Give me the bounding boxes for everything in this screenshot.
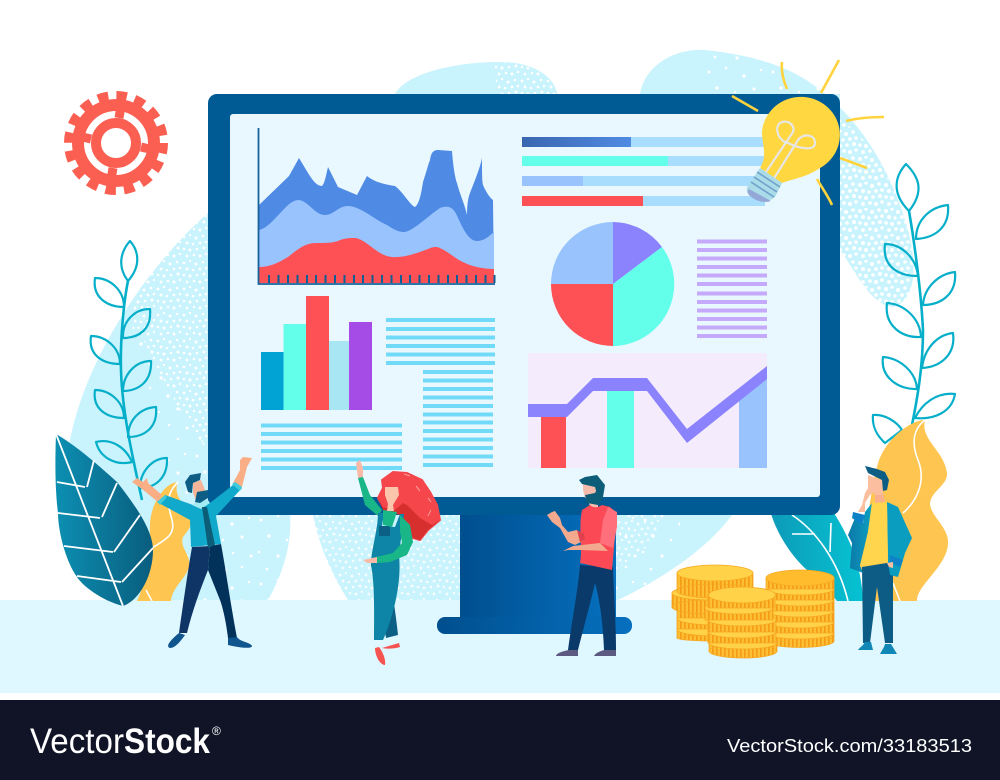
floor (0, 600, 1000, 693)
plant: right orange bush (858, 420, 948, 601)
cuffs (852, 512, 903, 567)
chart axes (258, 128, 495, 284)
text lines: column (423, 370, 493, 467)
bulb glass (760, 97, 840, 183)
face (868, 475, 883, 495)
combo chart (528, 353, 767, 468)
brand logo text: VectorStock (30, 722, 210, 761)
progress bars (522, 137, 765, 206)
registered mark: ® (212, 724, 221, 738)
plant: teal leaf behind man (770, 510, 863, 601)
lower hand (363, 557, 377, 563)
collar (192, 500, 210, 509)
legs (568, 565, 616, 650)
monitor frame (208, 94, 840, 515)
hair (185, 473, 201, 493)
trend line (528, 366, 767, 443)
person: man in red shirt (547, 475, 617, 656)
icon: light bulb (732, 60, 884, 205)
shoes (375, 643, 400, 665)
neck and face (385, 487, 399, 511)
plant: left orange bush (137, 482, 191, 601)
coins: back stack (672, 565, 753, 641)
background blob: top right (640, 50, 914, 307)
hand at chin (858, 488, 873, 512)
coins: right stack (766, 570, 834, 648)
text lines: legend purple (697, 240, 767, 338)
beard (195, 490, 208, 503)
shoes (858, 642, 897, 654)
filament (766, 122, 815, 180)
shoes (556, 650, 616, 656)
area chart (258, 128, 495, 284)
beard (585, 487, 603, 505)
person: man with raised arms (132, 457, 252, 648)
background blob: left (69, 213, 290, 600)
cuffs (157, 482, 242, 505)
arm on hip (376, 515, 413, 563)
jacket right panel (887, 502, 912, 577)
coins: front stack (705, 587, 777, 658)
legs (862, 562, 893, 643)
hands and forearms (132, 457, 252, 502)
hair shadow (378, 498, 440, 540)
text lines: right of bar chart (386, 318, 495, 365)
tie (202, 507, 215, 548)
coin stacks (672, 565, 834, 658)
text lines: below bar chart (261, 424, 402, 470)
shirt (860, 502, 888, 567)
hair (378, 472, 440, 540)
plant: left vine (91, 241, 167, 500)
bulb rays (732, 60, 884, 205)
raised arm (358, 477, 382, 516)
pointing forearm (563, 543, 608, 551)
hand in pocket (887, 562, 893, 568)
bulb base (747, 168, 782, 201)
raised hand (356, 460, 363, 478)
torso (580, 505, 617, 570)
hair highlights (404, 474, 431, 516)
bib pocket (379, 526, 390, 536)
person: woman with red hair (356, 460, 440, 665)
sleeve (600, 507, 617, 548)
monitor stand (437, 510, 632, 634)
jacket left panel (848, 503, 872, 573)
elbow cuff (577, 530, 585, 542)
shirt chest (383, 510, 397, 527)
face (193, 480, 205, 503)
shoes (168, 633, 252, 648)
icon: gear (69, 96, 163, 190)
neck (875, 493, 885, 503)
background blob: bottom centre (313, 515, 732, 600)
background blob: top centre (395, 62, 557, 94)
monitor screen (230, 114, 820, 497)
legs (208, 544, 237, 638)
pie chart (551, 222, 674, 346)
image id text: VectorStock.com/33183513 (727, 736, 972, 756)
bar chart (261, 296, 372, 410)
person: man in yellow shirt (848, 466, 912, 654)
back leg (371, 565, 398, 638)
shirt with sleeves (157, 485, 242, 547)
plant: big teal leaf (55, 434, 153, 606)
face (583, 483, 597, 498)
plant: right vine (873, 164, 955, 443)
raised forearm (547, 511, 585, 545)
footer band (0, 700, 1000, 780)
neck (588, 500, 598, 510)
overalls (371, 513, 404, 640)
hair (865, 466, 889, 491)
hair (579, 475, 605, 498)
